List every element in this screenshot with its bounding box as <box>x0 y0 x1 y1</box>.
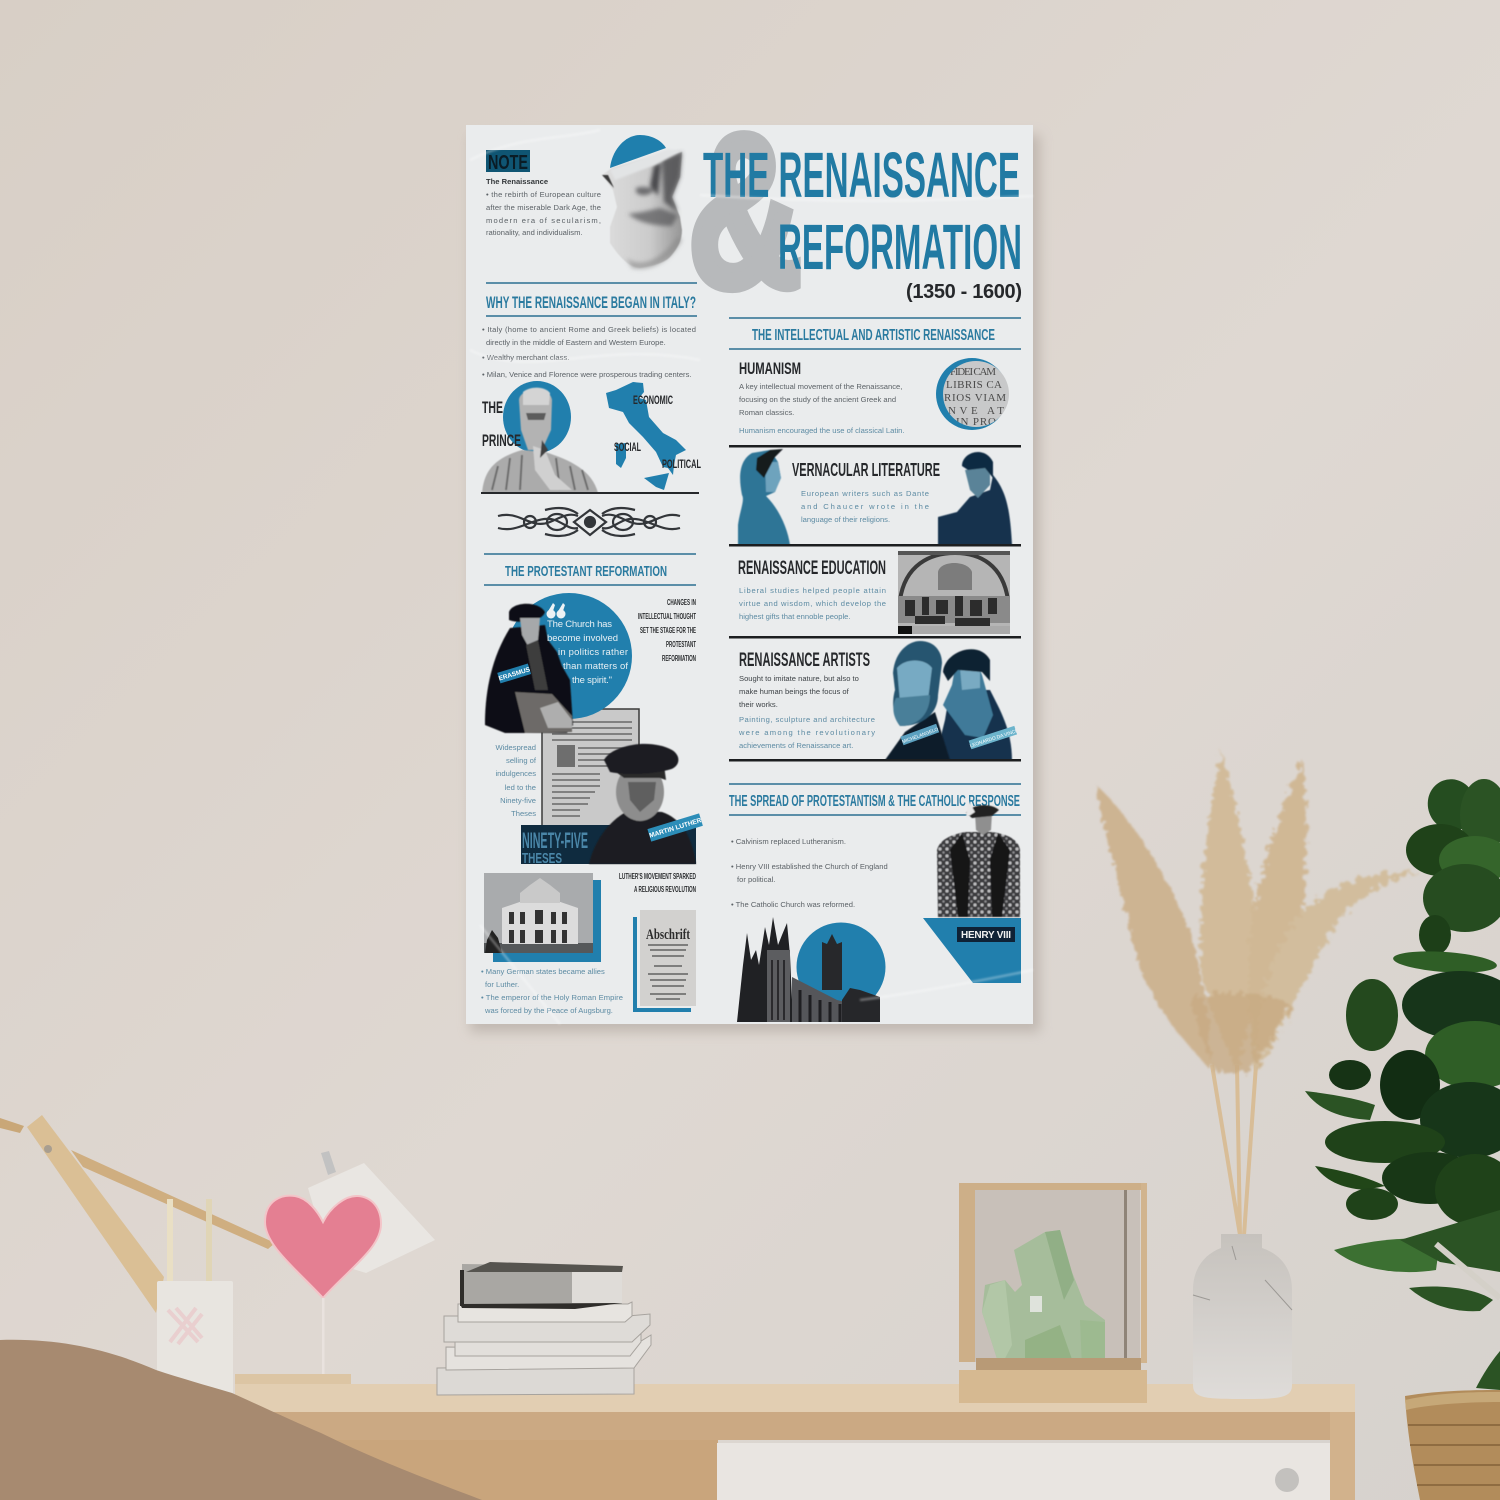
Henry VIII blue plaque <box>923 918 1021 983</box>
renaissance artists: RENAISSANCE ARTISTS <box>739 650 870 671</box>
renaissance education <box>738 551 1010 634</box>
section: why the renaissance began in Italy: WHY THE RENAISSANCE BEGAN IN ITALY? <box>486 293 696 312</box>
Michelangelo portrait <box>885 641 950 760</box>
renaissance education: Liberal studies helped people attain <box>739 586 886 595</box>
title: THE RENAISSANCE <box>703 139 1020 211</box>
section: the spread of protestantism: • The Catholic Church was reformed. <box>731 900 855 909</box>
section: why the renaissance began in Italy: • Italy (home to ancient Rome and Greek beliefs) is located <box>482 325 696 334</box>
caption: Luther's movement: A RELIGIOUS REVOLUTION <box>634 885 696 894</box>
quote text: The Church has <box>547 619 612 630</box>
poster sheet <box>466 125 1033 1024</box>
humanism: HUMANISM <box>739 359 801 378</box>
Henry VIII figure <box>937 800 1020 917</box>
renaissance artists: their works. <box>739 700 778 709</box>
marble vase <box>1193 1234 1292 1399</box>
caption: changes in intellectual thought: INTELLECTUAL THOUGHT <box>638 612 696 621</box>
blue quote circle <box>506 593 632 719</box>
vernacular literature <box>738 449 1012 545</box>
church photo on blue block <box>484 873 601 962</box>
chair <box>0 1340 482 1500</box>
Martin Luther portrait: NINETY-FIVE <box>522 828 588 853</box>
section: why the renaissance began in Italy: directly in the middle of Eastern and Western Europe. <box>486 338 666 347</box>
text: German states: for Luther. <box>485 980 519 989</box>
humanism: Roman classics. <box>739 408 794 417</box>
poster shadow <box>470 135 1040 1032</box>
Dante portrait <box>738 449 790 545</box>
text: German states: • The emperor of the Holy Roman Empire <box>481 993 623 1002</box>
Martin Luther portrait <box>521 744 703 867</box>
poster wrinkles <box>470 130 1033 1024</box>
note panel: modern era of secularism, <box>486 216 601 225</box>
title: REFORMATION <box>778 211 1022 283</box>
map of Italy <box>606 382 701 490</box>
title <box>703 139 1022 303</box>
vernacular literature: language of their religions. <box>801 515 890 524</box>
caption: changes in intellectual thought: REFORMATION <box>662 654 696 663</box>
decorative ornament <box>498 508 680 536</box>
quote text: the spirit." <box>572 675 612 686</box>
ampersand: & <box>688 90 802 333</box>
icon: inscribed globe: NVE AT <box>948 405 1004 417</box>
desk <box>235 1374 1355 1500</box>
woven basket <box>1405 1390 1500 1500</box>
humanism: Humanism encouraged the use of classical Latin. <box>739 426 904 435</box>
caption: changes in intellectual thought: PROTESTANT <box>666 640 696 649</box>
map of Italy: SOCIAL <box>614 440 641 454</box>
printed book cover <box>633 910 696 1012</box>
humanism: focusing on the study of the ancient Greek and <box>739 395 896 404</box>
quote text <box>546 603 628 686</box>
icon: inscribed globe: RIOS VIAM <box>944 392 1006 404</box>
ninety-five theses document <box>542 709 639 827</box>
stack of books <box>437 1262 651 1395</box>
section: the spread of protestantism: • Henry VIII established the Church of England <box>731 862 888 871</box>
vernacular literature: VERNACULAR LITERATURE <box>792 460 940 480</box>
bust with blue dome <box>602 135 682 269</box>
vernacular literature: European writers such as Dante <box>801 489 929 498</box>
icon: inscribed globe <box>936 358 1009 430</box>
the prince statue <box>481 381 699 494</box>
title: (1350 - 1600) <box>906 281 1022 303</box>
caption: Luther's movement <box>619 872 696 894</box>
divider: artists <box>729 759 1021 762</box>
caption: indulgences: Theses <box>511 809 536 818</box>
caption: indulgences: indulgences <box>495 769 536 778</box>
renaissance education: highest gifts that ennoble people. <box>739 612 850 621</box>
quote text: become involved <box>547 633 618 644</box>
caption: indulgences <box>495 743 537 818</box>
note panel: NOTE <box>488 152 528 174</box>
renaissance artists: Painting, sculpture and architecture <box>739 715 875 724</box>
quote text: in politics rather <box>558 647 628 658</box>
divider: humanism <box>729 445 1021 448</box>
map of Italy: POLITICAL <box>662 457 701 471</box>
pampas grass <box>1095 750 1420 1235</box>
caption: changes in intellectual thought <box>638 598 696 663</box>
renaissance artists: achievements of Renaissance art. <box>739 741 853 750</box>
divider: education <box>729 636 1021 638</box>
icon: inscribed globe: IN PRO <box>956 416 996 428</box>
divider: vernacular <box>729 544 1021 546</box>
Erasmus label: ERASMUS <box>498 666 532 683</box>
caption: Luther's movement: LUTHER'S MOVEMENT SPARKED <box>619 872 696 881</box>
caption: changes in intellectual thought: SET THE STAGE FOR THE <box>640 626 696 635</box>
text: German states: was forced by the Peace of Augsburg. <box>484 1006 613 1015</box>
note panel: rationality, and individualism. <box>486 228 583 237</box>
note panel: The Renaissance <box>486 177 548 186</box>
renaissance education: virtue and wisdom, which develop the <box>739 599 886 608</box>
section: intellectual and artistic renaissance: THE INTELLECTUAL AND ARTISTIC RENAISSANCE <box>752 327 995 344</box>
Leonardo portrait <box>935 649 1012 760</box>
Henry VIII blue plaque: HENRY VIII <box>961 930 1011 941</box>
text: German states: • Many German states became allies <box>481 967 605 976</box>
display box with green crystal <box>959 1183 1147 1403</box>
caption: indulgences: led to the <box>505 783 536 792</box>
desk lamp <box>0 1115 435 1313</box>
renaissance artists: make human beings the focus of <box>739 687 850 696</box>
section: why the renaissance began in Italy <box>482 282 697 379</box>
quote text: than matters of <box>563 661 628 672</box>
Martin Luther portrait: THESES <box>522 850 562 867</box>
section: the protestant reformation: THE PROTESTANT REFORMATION <box>505 563 667 580</box>
printed book cover: Abschrift <box>646 927 690 943</box>
section: why the renaissance began in Italy: • Wealthy merchant class. <box>482 353 569 362</box>
Erasmus portrait <box>485 604 573 733</box>
map of Italy: ECONOMIC <box>633 393 673 407</box>
pen cup <box>157 1199 233 1395</box>
section: the spread of protestantism: • Calvinism replaced Lutheranism. <box>731 837 846 846</box>
the prince statue: PRINCE <box>482 431 521 450</box>
icon: inscribed globe: LIBRIS CA <box>946 379 1002 391</box>
renaissance artists <box>738 641 1017 760</box>
humanism <box>739 358 1009 435</box>
icon: inscribed globe: FIDEI CAM <box>950 366 996 378</box>
vernacular literature: and Chaucer wrote in the <box>801 502 929 511</box>
the prince statue: THE <box>482 398 503 417</box>
potted plant <box>1305 772 1500 1390</box>
caption: indulgences: selling of <box>506 756 537 765</box>
Martin Luther label: MARTIN LUTHER <box>648 817 703 840</box>
text: German states <box>481 967 623 1015</box>
caption: indulgences: Widespread <box>495 743 536 752</box>
Michelangelo label: MICHELANGELO <box>901 727 940 745</box>
section: the spread of protestantism: for political. <box>737 875 775 884</box>
Leonardo label: LEONARDO DA VINCI <box>969 729 1017 749</box>
note panel: • the rebirth of European culture <box>486 190 601 199</box>
caption: indulgences: Ninety-five <box>500 796 536 805</box>
renaissance education: RENAISSANCE EDUCATION <box>738 558 886 579</box>
heart ornament <box>265 1196 381 1396</box>
cathedral with blue circle <box>737 917 886 1022</box>
Chaucer portrait <box>938 452 1012 545</box>
renaissance artists: were among the revolutionary <box>738 728 875 737</box>
caption: changes in intellectual thought: CHANGES IN <box>667 598 696 607</box>
section: the spread of protestantism <box>729 783 1021 909</box>
note panel <box>486 150 601 237</box>
renaissance artists: Sought to imitate nature, but also to <box>739 674 859 683</box>
humanism: A key intellectual movement of the Renaissance, <box>739 382 902 391</box>
School of Athens image <box>898 551 1010 634</box>
note panel: after the miserable Dark Age, the <box>486 203 601 212</box>
section: the spread of protestantism: THE SPREAD OF PROTESTANTISM & THE CATHOLIC RESPONSE <box>729 793 1020 810</box>
section: why the renaissance began in Italy: • Milan, Venice and Florence were prosperous trading centers. <box>482 370 692 379</box>
